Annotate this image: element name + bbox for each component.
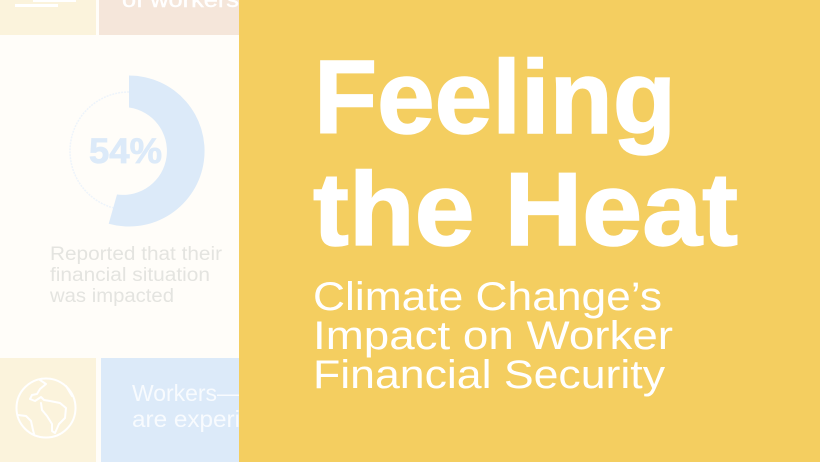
text block: donut caption: was impacted (49, 286, 174, 307)
panel: yellow title panel (239, 0, 820, 462)
panel: faded globe tile (0, 358, 96, 462)
text block: donut caption (49, 244, 223, 307)
donut chart: 54%: 54% (89, 132, 162, 171)
title: Feeling (314, 40, 676, 156)
text block: donut caption: financial situation (50, 265, 210, 286)
icon: globe (16, 378, 76, 438)
title: the Heat (313, 152, 738, 268)
subtitle (313, 275, 673, 397)
subtitle: Climate Change’s (313, 275, 662, 319)
panel: faded blue text tile (101, 358, 240, 462)
panel: faded top icon tile (0, 0, 96, 35)
subtitle: Impact on Worker (313, 314, 673, 358)
panel: faded blue text tile: are experi (132, 406, 240, 432)
panel: faded blue text tile: Workers— (132, 380, 240, 406)
donut chart: 54% (70, 75, 205, 226)
subtitle: Financial Security (313, 353, 665, 397)
text block: donut caption: Reported that their (50, 244, 223, 265)
title (313, 40, 738, 268)
panel: faded top text tile (99, 0, 240, 35)
